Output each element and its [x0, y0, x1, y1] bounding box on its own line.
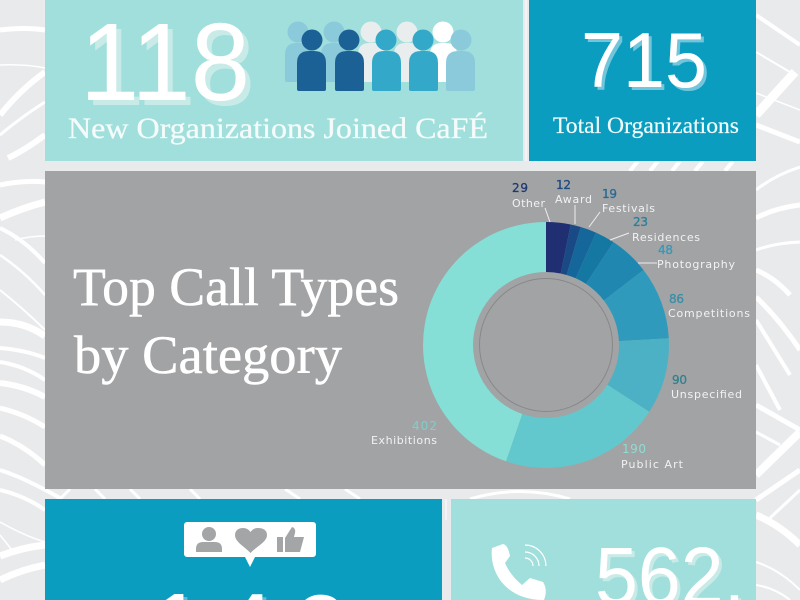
label: exhibitions [371, 419, 437, 447]
number: 118: 118 [85, 6, 255, 129]
label: unspecified: 90 [672, 373, 687, 387]
label: festivals: 19 [602, 187, 617, 201]
number: 715: 715 [581, 16, 707, 104]
label: residences [632, 215, 700, 244]
panel: top call types [45, 171, 756, 489]
label: public art [621, 442, 684, 471]
number: 118: 118 [80, 1, 250, 124]
label: residences: 23 [633, 215, 648, 229]
number: clipped social total [146, 571, 353, 600]
label: award: 12 [556, 178, 571, 192]
panel: social media [45, 499, 442, 600]
panel: calls [451, 499, 756, 600]
label: other [512, 181, 545, 210]
icon: phone with signal waves [492, 544, 546, 600]
icon: speech bubble with person, heart and thumb [184, 522, 316, 567]
label: competitions: Competitions [668, 307, 750, 320]
label: unspecified [671, 373, 742, 401]
number: 715: 715 [584, 19, 710, 107]
caption: new organizations joined: New Organizations Joined CaFÉ [68, 112, 488, 145]
label: photography: 48 [658, 243, 673, 257]
label: festivals [602, 187, 655, 215]
icon: group of people [285, 22, 475, 91]
caption: total organizations: Total Organizations [553, 113, 739, 138]
label: residences: Residences [632, 231, 700, 244]
heading: top call types by category: by Category [74, 325, 342, 385]
label: festivals: Festivals [602, 202, 655, 215]
label: public art: Public Art [621, 458, 684, 471]
leader lines [545, 205, 657, 263]
label: unspecified: Unspecified [671, 388, 742, 401]
label: other: Other [512, 197, 545, 210]
heading: top call types by category [73, 257, 399, 385]
label: award [555, 178, 592, 206]
panel: new organizations [45, 0, 523, 161]
label: exhibitions: Exhibitions [371, 434, 437, 447]
panel: total organizations [529, 0, 756, 161]
label: public art: 190 [622, 442, 646, 456]
label: competitions: 86 [669, 292, 684, 306]
label: other: 29 [512, 181, 528, 195]
heading: top call types by category: Top Call Types [73, 257, 399, 317]
label: competitions [668, 292, 750, 320]
label: photography [657, 243, 735, 271]
label: exhibitions: 402 [412, 419, 437, 433]
label: photography: Photography [657, 258, 735, 271]
chart: donut of call types [423, 222, 669, 468]
label: award: Award [555, 193, 592, 206]
